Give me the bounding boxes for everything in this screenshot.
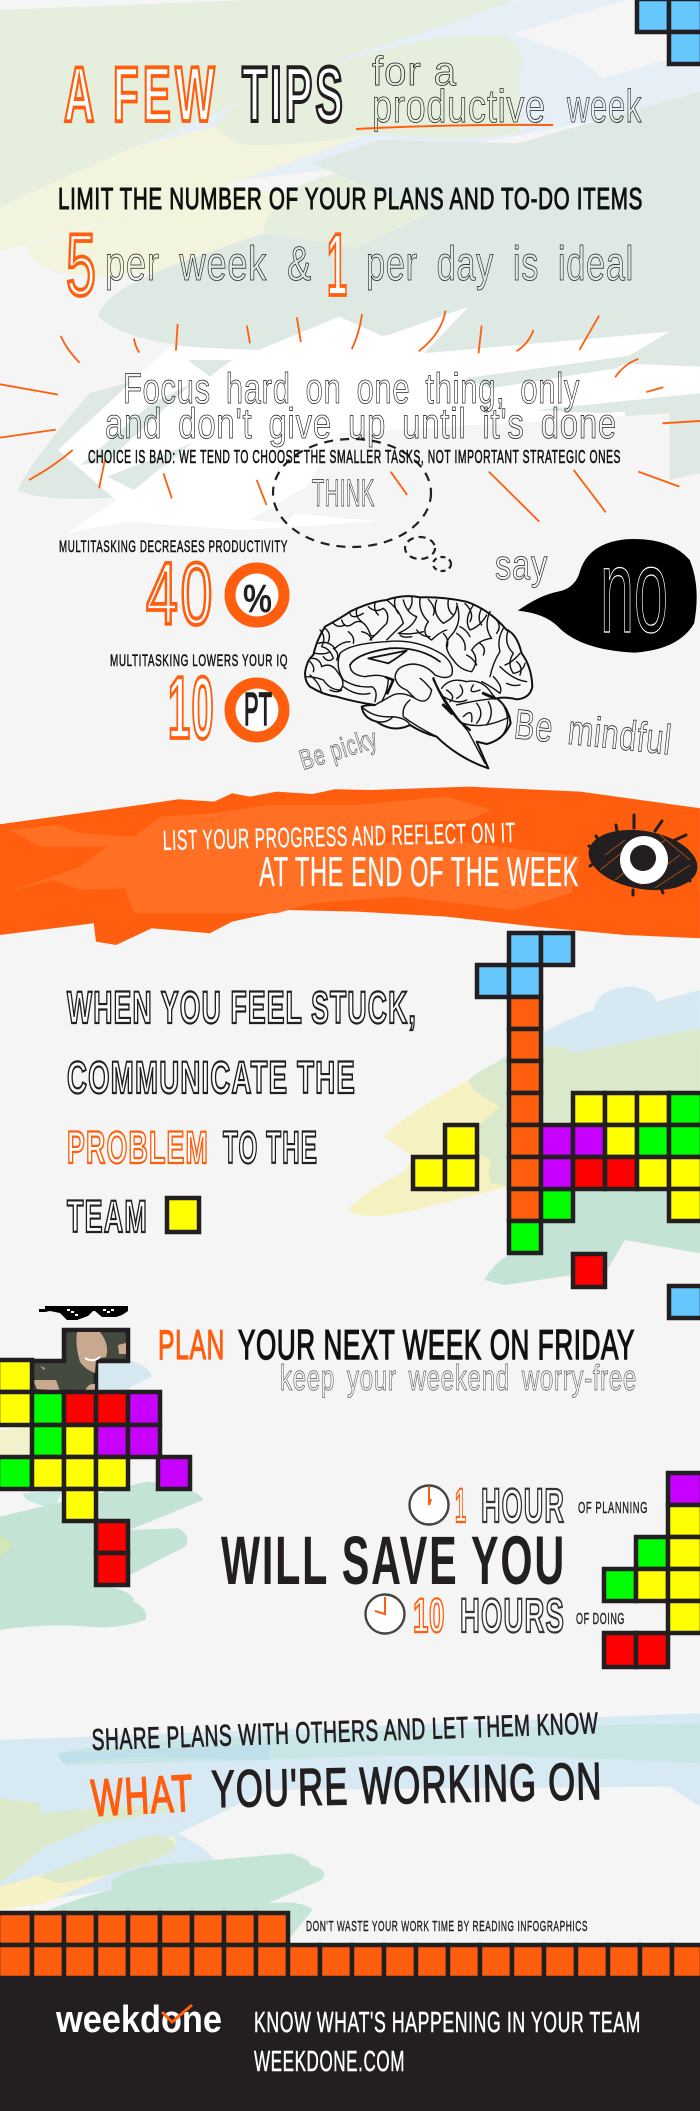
what: WHAT xyxy=(90,1765,195,1828)
title: productive: productive xyxy=(372,80,546,132)
problem: PROBLEM xyxy=(67,1122,209,1173)
falling red block xyxy=(573,1254,605,1287)
sunglasses xyxy=(39,1306,128,1320)
orange banner xyxy=(0,787,700,945)
number 5: 5 xyxy=(66,215,96,314)
tetris piece: top right blue xyxy=(637,0,700,64)
hour: HOUR xyxy=(481,1480,565,1533)
blue piece xyxy=(477,933,573,997)
orange column xyxy=(509,997,541,1221)
background paint strokes: bottom xyxy=(0,1713,700,1943)
think label: THINK xyxy=(312,473,375,515)
share plans text xyxy=(90,1707,603,1828)
value 40: 40 xyxy=(146,544,215,643)
percent badge: % xyxy=(243,577,272,621)
ideal plan count line xyxy=(66,215,634,314)
coloured blocks xyxy=(509,1093,700,1253)
background paint strokes: middle left xyxy=(0,1360,203,1630)
title: week: week xyxy=(566,80,642,132)
dashed thought cloud xyxy=(273,439,431,547)
banner paint shape xyxy=(0,787,700,945)
title underline xyxy=(356,125,553,129)
stat: 10 points xyxy=(110,651,288,757)
one hour will save you ten hours xyxy=(221,1480,648,1643)
title xyxy=(64,48,642,138)
brain illustration xyxy=(305,596,532,768)
of doing: OF DOING xyxy=(576,1611,625,1628)
stat: 40 percent xyxy=(59,537,288,643)
stat: 10 points: 10 xyxy=(168,658,215,757)
icon: yellow tile xyxy=(167,1198,199,1232)
website: WEEKDONE.COM xyxy=(254,2046,405,2078)
logo: weekdone: weekdone xyxy=(55,1999,222,2041)
be picky label: Be picky xyxy=(296,723,381,776)
icon: clock two xyxy=(366,1594,404,1634)
title: a few: A FEW xyxy=(64,50,219,138)
team: TEAM xyxy=(67,1191,148,1242)
think bubble xyxy=(273,439,451,571)
yellow piece left xyxy=(413,1125,477,1189)
title: for a: for a xyxy=(372,48,457,94)
orange brick wall xyxy=(0,1913,700,1978)
icon: eye xyxy=(584,815,700,898)
tetris stack: left xyxy=(0,1360,190,1585)
stat label: MULTITASKING LOWERS YOUR IQ xyxy=(110,651,288,670)
line 2: COMMUNICATE THE xyxy=(67,1052,356,1103)
icon: clock one xyxy=(410,1486,448,1524)
focus text xyxy=(105,365,617,448)
orange rays xyxy=(0,311,700,522)
line 1: WHEN YOU FEEL STUCK, xyxy=(67,982,417,1033)
per week text: per week & xyxy=(105,238,312,291)
percent badge xyxy=(230,568,284,622)
of planning: OF PLANNING xyxy=(578,1500,648,1517)
tetris stack: center right xyxy=(413,933,700,1318)
tetris stack: lower right xyxy=(604,1473,700,1667)
ideal plan count line: 1 xyxy=(327,215,347,314)
photo tiles with laughing face xyxy=(32,1330,128,1392)
pt badge xyxy=(230,683,284,737)
when you feel stuck text xyxy=(67,982,417,1242)
one hour will save you ten hours: 1 xyxy=(455,1480,466,1533)
footer background xyxy=(0,1977,700,2111)
plan word: PLAN xyxy=(158,1321,225,1368)
footer xyxy=(0,1977,700,2111)
plan your next week xyxy=(158,1321,637,1398)
pt badge: PT xyxy=(244,683,272,735)
background paint strokes: middle right xyxy=(348,987,700,1285)
number 10: 10 xyxy=(413,1590,445,1643)
hours: HOURS xyxy=(460,1590,565,1643)
small bubble 2 xyxy=(433,557,451,571)
speech bubble no xyxy=(518,524,697,658)
falling blue block xyxy=(669,1286,700,1318)
title: tips: TIPS xyxy=(242,50,346,138)
to the: TO THE xyxy=(223,1122,318,1173)
background paint strokes: top xyxy=(0,0,700,533)
small bubble 1 xyxy=(405,537,435,559)
say label: say xyxy=(495,541,548,588)
stat label: MULTITASKING DECREASES PRODUCTIVITY xyxy=(59,537,288,556)
